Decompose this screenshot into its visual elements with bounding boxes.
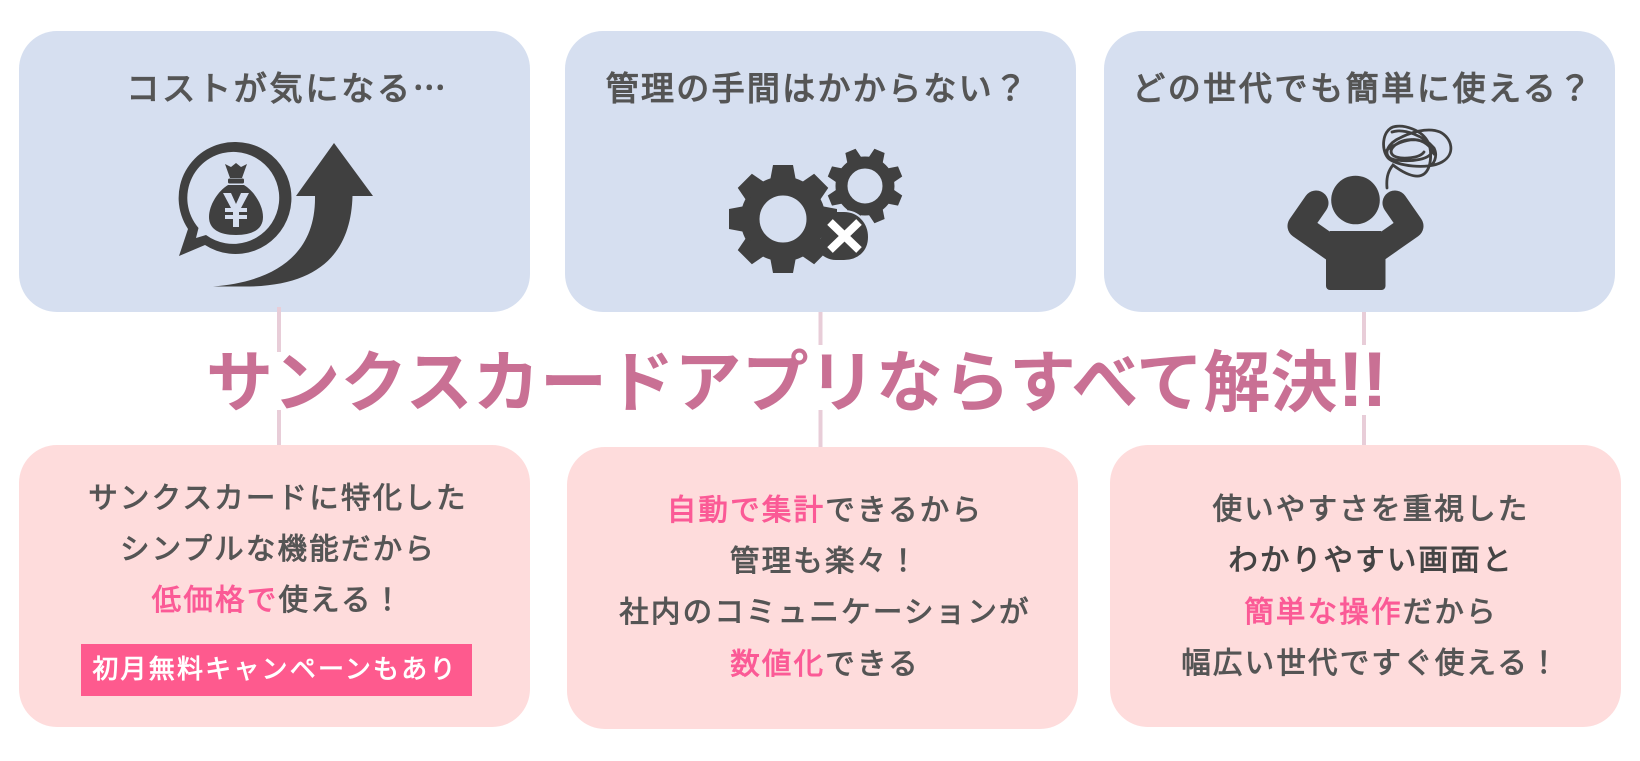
text block: cost solution: サンクスカードに特化した [88, 482, 468, 515]
text block: ease of use solution: わかりやすい画面と [1228, 544, 1514, 577]
panel: solution ease of use [1110, 445, 1621, 727]
heading: management: 管理の手間はかからない？ [606, 70, 1029, 107]
text block: ease of use solution: 簡単な操作だから [1244, 596, 1498, 629]
heading: ease of use: どの世代でも簡単に使える？ [1132, 70, 1594, 107]
text block: ease of use solution [1181, 493, 1561, 680]
text block: cost solution: シンプルな機能だから [120, 533, 436, 566]
text block: management solution: 管理も楽々！ [730, 545, 920, 578]
panel: solution cost [19, 445, 530, 727]
connector: right [1362, 312, 1366, 447]
text block: cost solution [88, 482, 468, 617]
text block: management solution: 自動で集計できるから [667, 494, 983, 527]
panel: cost concern [19, 31, 530, 312]
text block: management solution: 数値化できる [730, 648, 920, 681]
callout: first month free: 初月無料キャンペーンもあり [92, 654, 458, 684]
connector: left [277, 307, 281, 446]
icon: gears with cross [729, 148, 903, 273]
text block: ease of use solution: 幅広い世代ですぐ使える！ [1181, 647, 1561, 680]
panel: ease of use concern [1104, 31, 1615, 312]
text block: cost solution: 低価格で使える！ [152, 584, 404, 617]
heading: cost: コストが気になる… [126, 62, 449, 110]
text block: management solution [619, 494, 1031, 681]
text block: management solution: 社内のコミュニケーションが [619, 596, 1031, 629]
icon: confused person [1300, 126, 1451, 290]
connector: center [818, 312, 822, 450]
main title: サンクスカードアプリならすべて解決!! [206, 335, 1386, 423]
panel: management concern [565, 31, 1076, 312]
callout: first month free [81, 644, 472, 696]
icon: yen bubble and rising arrow [179, 142, 373, 287]
panel: solution management [567, 447, 1078, 729]
text block: ease of use solution: 使いやすさを重視した [1212, 493, 1530, 526]
